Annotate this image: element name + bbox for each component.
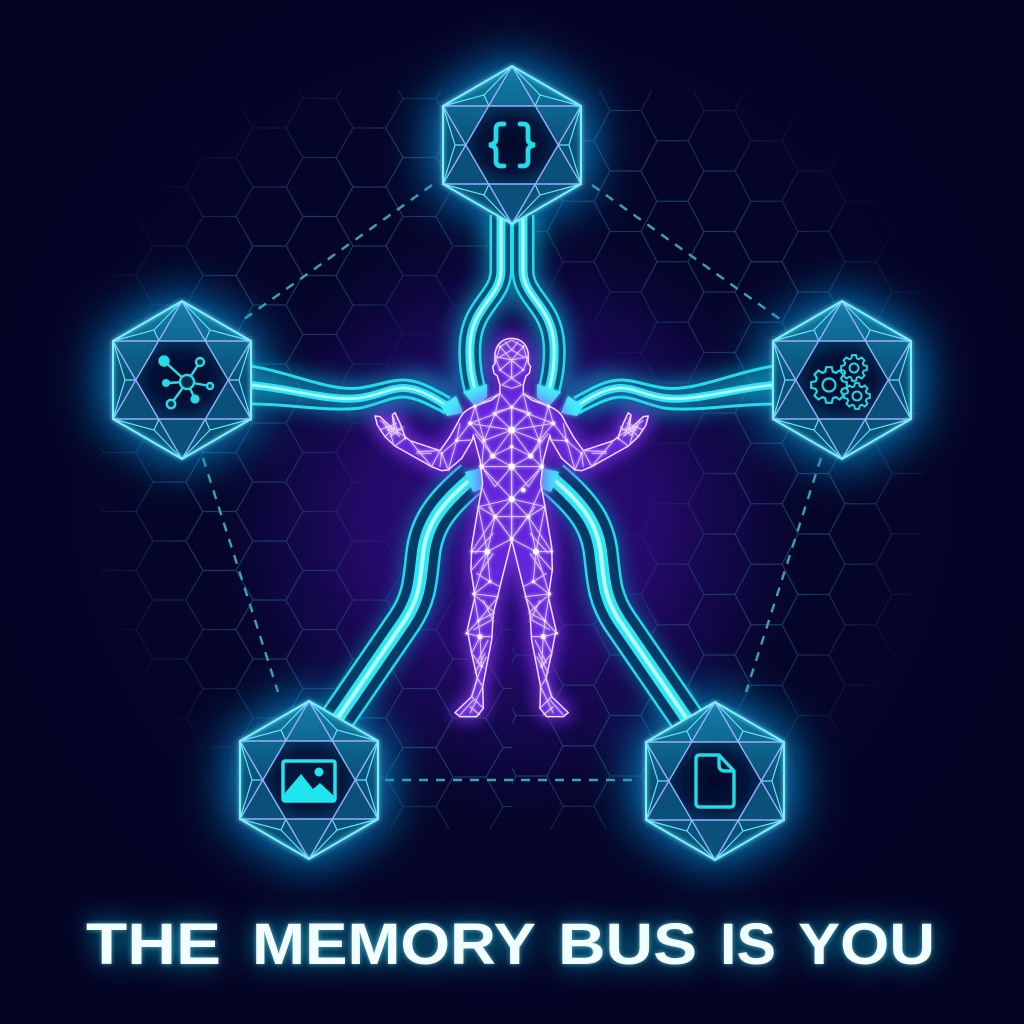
title: YOU <box>798 912 935 977</box>
icon: code braces <box>489 124 535 166</box>
cable: left node to shoulder <box>250 366 453 413</box>
node: document <box>646 702 784 860</box>
icon: document <box>696 755 734 807</box>
cable glow <box>252 215 772 716</box>
title: IS <box>720 912 776 977</box>
cable: image node to torso <box>335 478 472 722</box>
human figure <box>375 338 648 717</box>
cable: top node to head, right branch <box>523 215 554 390</box>
title: THE <box>86 912 221 977</box>
cable: document node to torso <box>552 478 689 722</box>
icon: image picture <box>283 761 335 801</box>
arrowheads <box>441 384 583 492</box>
dashed pentagon connections <box>203 185 821 780</box>
node: gears <box>773 301 911 459</box>
hexagon grid <box>100 90 922 830</box>
cable: right node to shoulder <box>571 366 774 413</box>
title: MEMORY <box>252 912 536 977</box>
node: code braces <box>443 66 581 224</box>
cable: top node to head, left branch <box>470 215 501 390</box>
node glows <box>104 57 920 867</box>
title: BUS <box>558 912 697 977</box>
node: network graph <box>113 301 251 459</box>
title <box>86 912 935 977</box>
icon: gears <box>811 355 870 409</box>
icon: network graph <box>160 356 213 408</box>
node: image <box>240 701 378 859</box>
